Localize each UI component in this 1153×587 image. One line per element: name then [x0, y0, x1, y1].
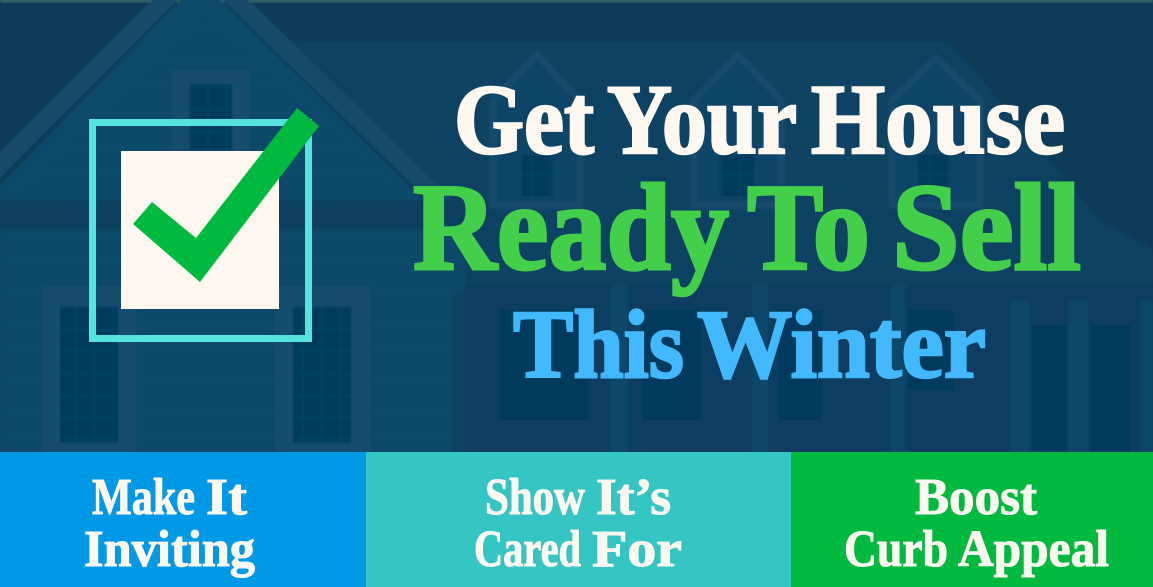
dormers	[493, 55, 980, 205]
panel label: Cared	[474, 521, 581, 578]
title line 3: Winter	[697, 291, 986, 399]
dark eave band	[0, 200, 465, 229]
checkbox icon	[92, 108, 319, 338]
panel: make it inviting	[0, 452, 366, 587]
windows left	[60, 306, 118, 443]
lower storey right	[465, 285, 1153, 452]
lower windows right	[500, 310, 1130, 452]
porch columns	[610, 285, 1153, 452]
title line 2: Sell	[892, 159, 1081, 296]
title line 2: Ready	[413, 159, 729, 296]
panel label: For	[592, 521, 682, 578]
panel: boost curb appeal	[791, 452, 1153, 587]
panel label: Show	[485, 469, 585, 526]
panel label: Boost	[915, 469, 1038, 526]
title line 1: House	[811, 64, 1065, 175]
check mark	[133, 108, 319, 282]
gable trim	[0, 0, 446, 205]
title line 1: Get	[454, 64, 594, 175]
panel label: Appeal	[958, 521, 1109, 578]
roof and upper storey right	[290, 42, 1153, 452]
panel label: It	[206, 469, 248, 526]
inner box	[121, 151, 279, 309]
window frames left	[42, 286, 136, 452]
porch roof	[1000, 222, 1153, 285]
panel label: It’s	[596, 469, 671, 526]
title	[413, 64, 1081, 399]
title line 1: Your	[607, 64, 797, 175]
background: blue-tinted house photo	[0, 0, 1153, 452]
outer box	[92, 122, 308, 338]
main gable wall	[0, 0, 465, 452]
panel label: Inviting	[84, 521, 255, 578]
title line 3: This	[513, 291, 684, 399]
title line 2: To	[747, 159, 870, 296]
panel: show it's cared for	[366, 452, 791, 587]
panel label: Make	[92, 469, 195, 526]
panel label: Curb	[844, 521, 948, 578]
